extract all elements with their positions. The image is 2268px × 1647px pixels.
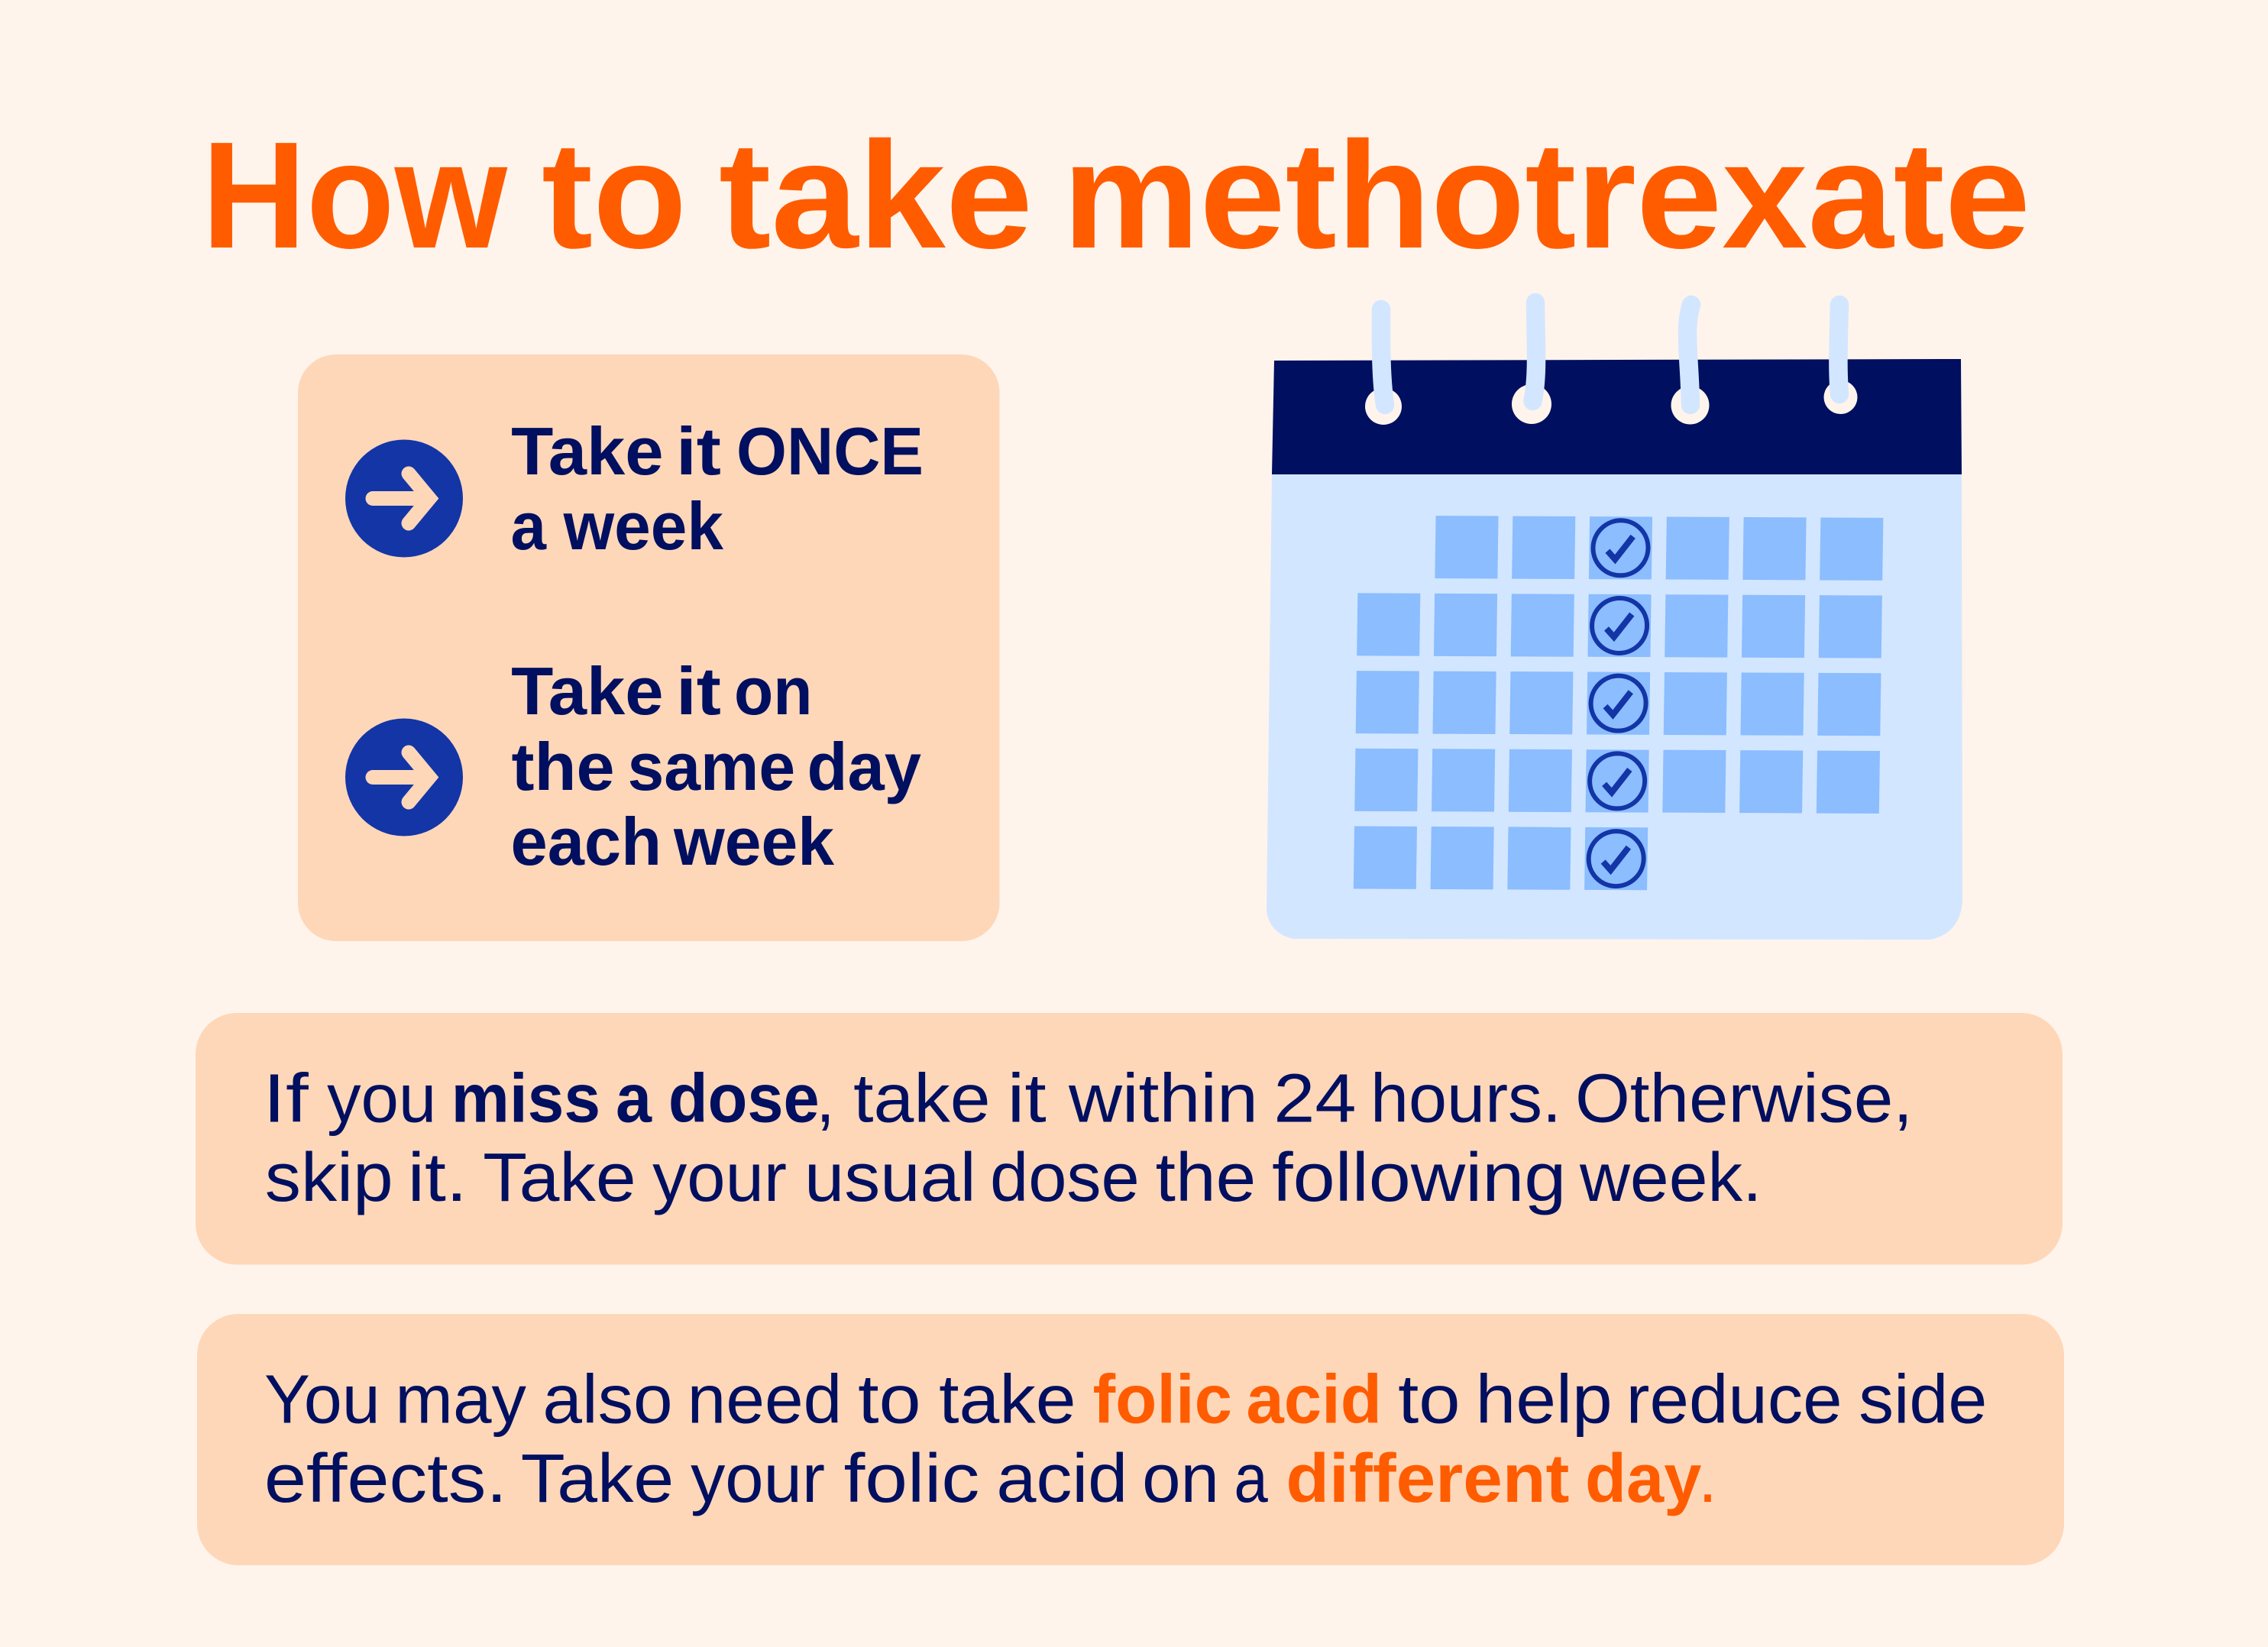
text: missed dose advice: usual — [804, 1140, 976, 1216]
icon: arrow circle same day — [345, 718, 463, 836]
text: missed dose advice — [263, 1060, 1913, 1216]
text: take it on the same day each week: week — [673, 804, 835, 879]
text: take it on the same day each week: same — [628, 729, 795, 804]
text: take it on the same day each week — [510, 653, 921, 879]
text: folic acid advice: acid — [996, 1441, 1128, 1517]
calendar weekly check marks — [1588, 520, 1648, 886]
text: folic acid advice: different — [1286, 1441, 1569, 1517]
text: folic acid advice: may — [395, 1361, 526, 1438]
text: folic acid advice: side — [1859, 1361, 1987, 1438]
calendar page — [1267, 474, 1962, 940]
text: missed dose advice: 24 — [1273, 1060, 1357, 1137]
calendar day grid — [1354, 516, 1883, 891]
text: take it on the same day each week: day — [807, 729, 921, 804]
text: missed dose advice: within — [1068, 1060, 1258, 1137]
text: take it on the same day each week: on — [734, 653, 813, 729]
panel: dosing instructions — [298, 354, 999, 941]
panel: folic acid — [197, 1314, 2064, 1565]
text: take it once a week: a — [510, 488, 547, 564]
text: missed dose advice: dose — [668, 1060, 820, 1137]
text: take it on the same day each week: it — [676, 653, 721, 729]
text: folic acid advice: a — [1234, 1441, 1269, 1517]
text: missed dose advice: week. — [1579, 1140, 1762, 1216]
panel background — [298, 354, 999, 941]
text: missed dose advice: the — [1156, 1140, 1256, 1216]
text: folic acid advice: You — [264, 1361, 380, 1438]
text: take it on the same day each week: each — [510, 804, 662, 879]
panel background — [197, 1314, 2064, 1565]
text: take it on the same day each week: the — [512, 729, 614, 804]
text: folic acid advice: also — [542, 1361, 673, 1438]
panel: missed dose — [196, 1013, 2063, 1265]
title: take — [719, 111, 1033, 280]
text: missed dose advice: miss — [451, 1060, 600, 1137]
text: folic acid advice: acid — [1246, 1361, 1382, 1438]
text: missed dose advice: , — [816, 1060, 835, 1137]
calendar header — [1272, 359, 1962, 474]
text: missed dose advice: it. — [408, 1140, 468, 1216]
title — [202, 111, 2030, 280]
panel background — [196, 1013, 2063, 1265]
text: folic acid advice: to — [1398, 1361, 1461, 1438]
text: missed dose advice: Otherwise, — [1575, 1060, 1913, 1137]
text: folic acid advice: folic — [1093, 1361, 1232, 1438]
text: folic acid advice: need — [688, 1361, 842, 1438]
text: take it once a week: week — [563, 488, 724, 564]
text: folic acid advice: to — [858, 1361, 921, 1438]
text: folic acid advice — [264, 1361, 1987, 1517]
text: take it on the same day each week: Take — [511, 653, 663, 729]
text: folic acid advice: effects. — [264, 1441, 507, 1517]
text: take it once a week: ONCE — [736, 413, 924, 489]
text: missed dose advice: following — [1272, 1140, 1566, 1216]
icon: calendar — [1267, 303, 1962, 940]
text: missed dose advice: hours. — [1370, 1060, 1561, 1137]
text: missed dose advice: you — [327, 1060, 436, 1137]
text: take it once a week: it — [676, 413, 721, 489]
text: missed dose advice: If — [263, 1060, 309, 1137]
text: missed dose advice: your — [652, 1140, 787, 1216]
text: missed dose advice: a — [616, 1060, 652, 1137]
text: missed dose advice: Take — [483, 1140, 636, 1216]
text: missed dose advice: take — [853, 1060, 991, 1137]
text: take it once a week — [510, 413, 924, 564]
text: folic acid advice: your — [691, 1441, 825, 1517]
text: missed dose advice: skip — [265, 1140, 393, 1216]
text: missed dose advice: dose — [990, 1140, 1140, 1216]
icon: arrow circle once a week — [345, 440, 463, 558]
text: folic acid advice: folic — [844, 1441, 979, 1517]
text: folic acid advice: day — [1585, 1441, 1701, 1517]
title: How — [202, 111, 508, 280]
title: to — [542, 111, 687, 280]
text: folic acid advice: . — [1698, 1441, 1717, 1517]
title: methotrexate — [1063, 111, 2030, 280]
text: folic acid advice: help — [1476, 1361, 1613, 1438]
text: folic acid advice: Take — [521, 1441, 674, 1517]
text: folic acid advice: take — [939, 1361, 1076, 1438]
text: folic acid advice: reduce — [1626, 1361, 1843, 1438]
calendar binding rings — [1381, 303, 1839, 405]
text: take it once a week: Take — [511, 413, 663, 489]
text: folic acid advice: on — [1142, 1441, 1219, 1517]
text: missed dose advice: it — [1008, 1060, 1047, 1137]
